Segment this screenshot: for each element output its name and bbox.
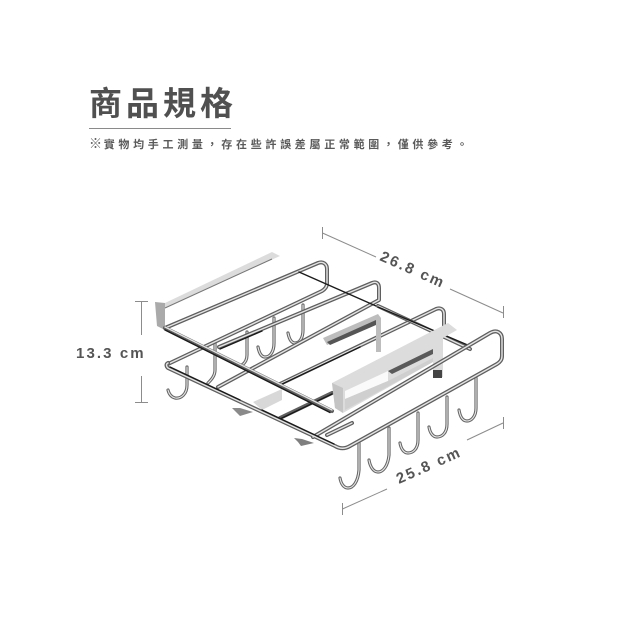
- feet: [232, 408, 314, 446]
- back frame rail: [165, 262, 327, 364]
- dimension: depth 26.8 cm: [322, 227, 504, 318]
- front frame rail: [166, 331, 502, 448]
- diagonal rods: [165, 272, 470, 412]
- cross rods: [218, 282, 444, 435]
- middle bracket: [253, 314, 381, 410]
- dimension: width 25.8 cm: 25.8 cm: [394, 444, 464, 488]
- metal rack: [155, 252, 502, 488]
- dimension: width 25.8 cm: [342, 417, 504, 515]
- dimension: height 13.3 cm: [76, 301, 148, 402]
- dimension: depth 26.8 cm: 26.8 cm: [377, 248, 448, 292]
- measurement note: ※實物均手工測量，存在些許誤差屬正常範圍，僅供參考。: [89, 136, 471, 151]
- right bracket: [332, 323, 457, 413]
- back hooks: [168, 305, 303, 398]
- dimension: height 13.3 cm: 13.3 cm: [76, 345, 146, 362]
- title: 商品規格: [89, 85, 237, 122]
- front hooks: [340, 378, 476, 488]
- left bracket: [155, 252, 280, 330]
